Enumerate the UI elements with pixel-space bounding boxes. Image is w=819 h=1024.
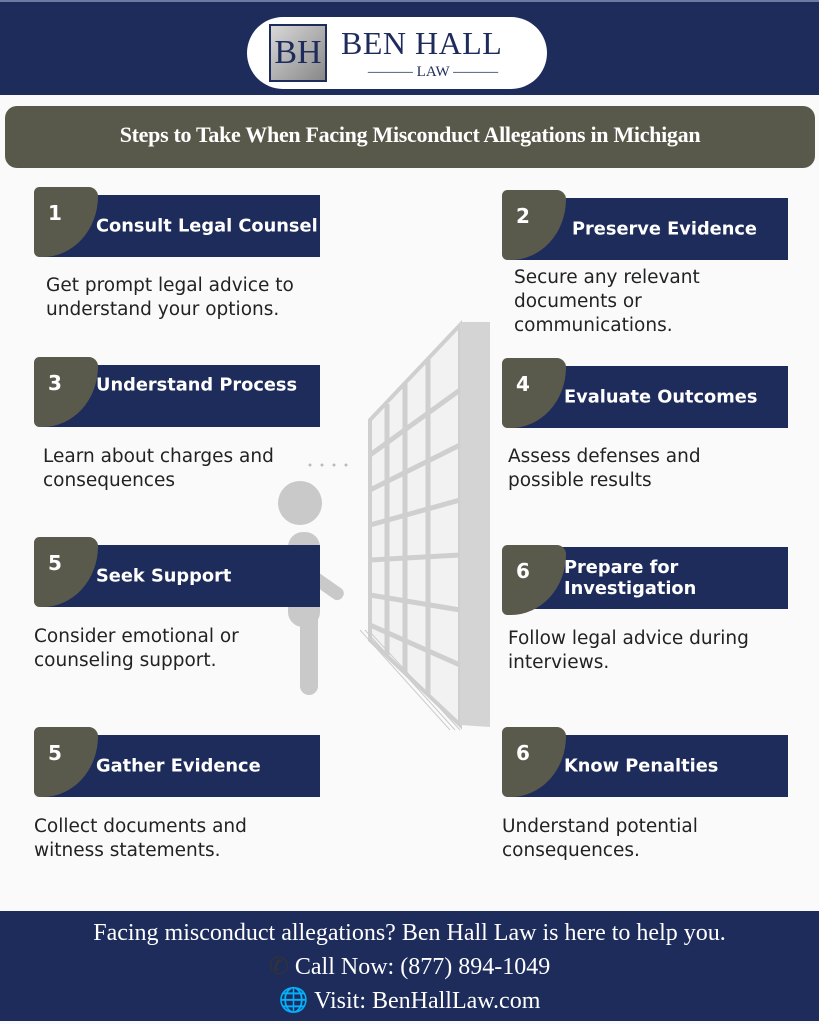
step 2: Secure any relevant	[514, 267, 700, 288]
step 4: Assess defenses and	[508, 446, 701, 467]
footer: 🌐 Visit: BenHallLaw.com	[279, 988, 540, 1014]
step 5: 5	[48, 551, 62, 575]
footer	[0, 911, 819, 1021]
logo mark: BH	[274, 34, 322, 71]
step 5b: Collect documents and	[34, 816, 247, 837]
step 4: 4	[516, 372, 530, 396]
step 6: 6	[516, 559, 530, 583]
step 5b	[34, 727, 320, 861]
step 5: counseling support.	[34, 650, 216, 671]
step 6b: 6	[516, 741, 530, 765]
logo text: BEN HALL	[341, 25, 502, 61]
step 5: Seek Support	[96, 566, 231, 586]
step 5: Consider emotional or	[34, 626, 239, 647]
title bar	[5, 106, 815, 168]
title bar: Steps to Take When Facing Misconduct Allegations in Michigan	[120, 122, 700, 147]
step 4	[502, 358, 788, 491]
step 3: Learn about charges and	[43, 446, 274, 467]
header band	[0, 0, 819, 95]
step 4: Evaluate Outcomes	[564, 386, 757, 408]
step 6b	[502, 727, 788, 861]
step 6b: consequences.	[502, 840, 640, 861]
step 3: consequences	[43, 470, 175, 491]
logo pill: ——— LAW ———	[368, 64, 498, 80]
logo mark	[269, 24, 327, 82]
step 6b: Know Penalties	[564, 756, 718, 776]
step 2	[502, 190, 788, 336]
footer: ✆ Call Now: (877) 894-1049	[269, 954, 550, 980]
logo pill	[247, 17, 547, 89]
step 6	[502, 545, 788, 673]
step 5b: Gather Evidence	[96, 756, 261, 776]
step 3: Understand Process	[96, 374, 297, 396]
step 6: interviews.	[508, 652, 609, 673]
step 2: communications.	[514, 315, 673, 336]
step 1: understand your options.	[46, 299, 279, 320]
step 5	[34, 537, 320, 671]
step 3	[34, 357, 320, 491]
step 6b: Understand potential	[502, 816, 698, 837]
step 1: 1	[48, 201, 62, 225]
step 2: Preserve Evidence	[572, 218, 757, 240]
footer: Facing misconduct allegations? Ben Hall Law is here to help you.	[93, 920, 726, 946]
step 6: Prepare for	[564, 557, 678, 578]
step 1: Get prompt legal advice to	[46, 275, 294, 296]
step 6: Follow legal advice during	[508, 628, 749, 649]
illustration: person and wall	[278, 320, 490, 730]
step 3: 3	[48, 371, 62, 395]
step 5b: witness statements.	[34, 840, 221, 861]
step 1	[34, 187, 320, 320]
step 2: documents or	[514, 291, 642, 312]
step 2: 2	[516, 204, 530, 228]
step 1: Consult Legal Counsel	[96, 216, 318, 236]
step 5b: 5	[48, 741, 62, 765]
step 4: possible results	[508, 470, 652, 491]
step 6: Investigation	[564, 578, 696, 599]
